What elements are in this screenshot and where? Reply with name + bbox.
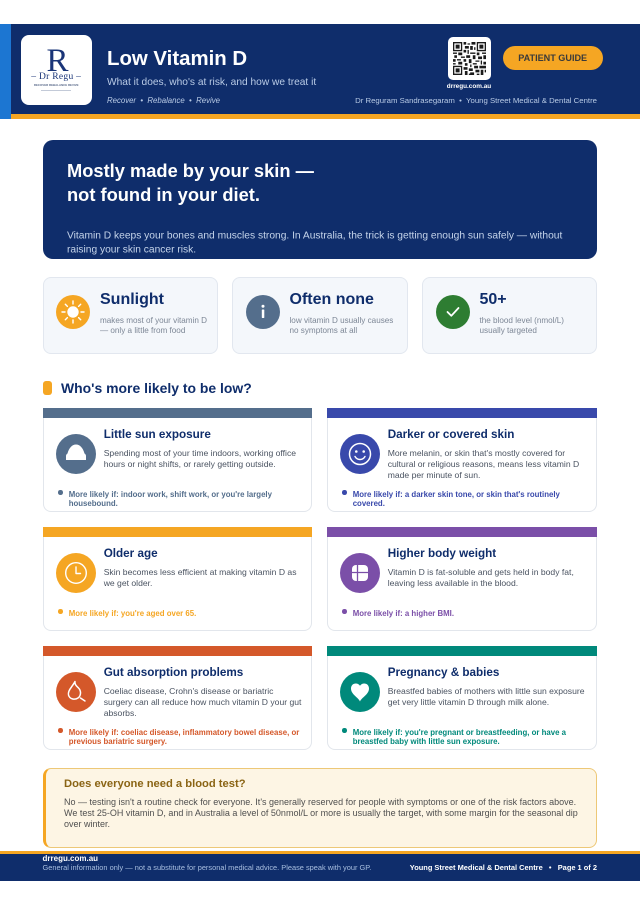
card body: Breastfed babies of mothers with little sun exposure	[388, 686, 584, 696]
bullet dot	[342, 609, 347, 614]
card body: cultural or religious reasons, means less vitamin D	[388, 459, 579, 469]
bullet dot	[58, 609, 63, 614]
hero body: raising your skin cancer risk.	[67, 244, 196, 256]
risk note: covered.	[353, 499, 385, 508]
footer disclaimer: General information only — not a substitute for personal medical advice. Please speak with your GP.	[42, 863, 371, 872]
callout body	[64, 797, 578, 829]
stat value: Sunlight	[100, 290, 164, 308]
icon: check	[436, 295, 470, 329]
risk note: More likely if: you're pregnant or breastfeeding, or have a	[353, 728, 566, 736]
icon: heart	[340, 672, 380, 712]
stat description	[290, 316, 393, 334]
card title: Little sun exposure	[104, 428, 211, 441]
risk note: More likely if: a higher BMI.	[353, 608, 454, 618]
card body: Coeliac disease, Crohn's disease or bariatric	[104, 686, 273, 696]
card body	[104, 448, 296, 469]
card body: hours or night shifts, or rarely getting outside.	[104, 459, 276, 469]
stat description	[480, 316, 564, 334]
colour bar	[327, 527, 597, 537]
footer website: drregu.com.au	[42, 854, 98, 863]
hero body: Vitamin D keeps your bones and muscles strong. In Australia, the trick is getting enough sun safely — without	[67, 230, 562, 242]
icon: sun	[56, 295, 90, 329]
card title: Gut absorption problems	[104, 666, 243, 679]
risk note: More likely if: indoor work, shift work, or you're largely	[69, 490, 272, 498]
risk note	[69, 728, 300, 746]
card body: More melanin, or skin that's mostly covered for	[388, 448, 565, 458]
card: gut absorption problems	[43, 646, 312, 750]
header banner	[0, 24, 640, 119]
tagline: Recover • Rebalance • Revive	[107, 96, 220, 105]
subtitle: What it does, who's at risk, and how we treat it	[107, 77, 316, 88]
stat description: no symptoms at all	[290, 326, 357, 334]
stat description	[100, 316, 207, 334]
risk note	[69, 490, 272, 508]
bullet dot	[58, 728, 63, 733]
patient guide button	[503, 46, 603, 70]
callout heading: Does everyone need a blood test?	[64, 778, 246, 790]
risk note: breastfed baby with little sun exposure.	[353, 737, 500, 746]
icon: body composition	[340, 553, 380, 593]
icon: smile	[340, 434, 380, 474]
card body: Skin becomes less efficient at making vitamin D as	[104, 567, 296, 577]
stat description: — only a little from food	[100, 326, 185, 334]
callout body: over winter.	[64, 819, 110, 829]
colour bar	[327, 408, 597, 418]
patient guide button: PATIENT GUIDE	[518, 53, 587, 63]
card body: surgery can all reduce how much vitamin D your gut	[104, 697, 301, 707]
stat description: low vitamin D usually causes	[290, 316, 393, 325]
QR code	[448, 37, 491, 80]
colour bar	[43, 527, 312, 537]
icon: info	[246, 295, 280, 329]
card body: leaving less available in the blood.	[388, 578, 518, 588]
bullet dot	[342, 490, 347, 495]
hero heading: Mostly made by your skin —	[67, 160, 314, 181]
hero heading	[67, 160, 314, 205]
callout body: We test 25-OH vitamin D, and in Australia a level of 50nmol/L or more is usually the target, with some margin for the seasonal dip	[64, 808, 578, 818]
footer	[0, 851, 640, 881]
card body: absorbs.	[104, 708, 137, 718]
logo strapline: RECOVER REBALANCE REVIVE	[34, 83, 79, 87]
heading marker	[42, 381, 52, 395]
card: higher body weight	[327, 527, 597, 631]
card body: get very little vitamin D through milk alone.	[388, 697, 549, 707]
icon: clock	[56, 553, 96, 593]
QR caption: drregu.com.au	[447, 83, 491, 90]
stat: sunlight	[42, 277, 218, 354]
icon: cloud	[56, 434, 96, 474]
logo monogram: R	[46, 42, 69, 78]
risk note	[353, 490, 560, 508]
card title: Darker or covered skin	[388, 428, 514, 441]
hero panel	[43, 140, 597, 259]
risk note: More likely if: you're aged over 65.	[69, 608, 196, 618]
card body	[104, 686, 302, 718]
colour bar	[43, 408, 312, 418]
left accent stripe	[0, 24, 11, 119]
card body	[388, 567, 574, 588]
stat description: makes most of your vitamin D	[100, 316, 207, 325]
callout: blood test	[43, 768, 597, 848]
logo card	[21, 34, 92, 105]
title: Low Vitamin D	[107, 48, 247, 70]
stat: 50+	[422, 277, 597, 354]
stat: often none	[232, 277, 408, 354]
callout body: No — testing isn't a routine check for everyone. It's generally reserved for people with symptoms or one of the risk factors above.	[64, 797, 576, 807]
heading text: Who's more likely to be low?	[61, 380, 252, 396]
stat description: the blood level (nmol/L)	[480, 316, 564, 325]
clinician and clinic: Dr Reguram Sandrasegaram • Young Street Medical & Dental Centre	[355, 96, 597, 105]
card title: Older age	[104, 547, 158, 560]
card body	[388, 686, 584, 707]
card: older age	[43, 527, 312, 631]
footer clinic and page: Young Street Medical & Dental Centre • Page 1 of 2	[410, 863, 597, 872]
stat value: Often none	[290, 290, 374, 308]
bullet dot	[342, 728, 347, 733]
logo ornament	[41, 90, 71, 91]
hero heading: not found in your diet.	[67, 184, 260, 205]
card title: Higher body weight	[388, 547, 496, 560]
card body: made per minute of sun.	[388, 470, 480, 480]
colour bar	[43, 646, 312, 656]
colour bar	[327, 646, 597, 656]
section heading	[43, 380, 252, 396]
logo name: – Dr Regu –	[31, 72, 81, 82]
card body: Spending most of your time indoors, working office	[104, 448, 296, 458]
stat value: 50+	[480, 290, 507, 308]
card: pregnancy and babies	[327, 646, 597, 750]
risk note	[353, 728, 566, 746]
header gold rule	[11, 114, 640, 119]
stat description: usually targeted	[480, 326, 537, 334]
card body	[388, 448, 579, 480]
risk note: More likely if: a darker skin tone, or skin that's routinely	[353, 490, 560, 498]
card body: Vitamin D is fat-soluble and gets held in body fat,	[388, 567, 574, 577]
card body	[104, 567, 296, 588]
card: little sun exposure	[43, 408, 312, 512]
card body: we get older.	[104, 578, 152, 588]
hero body	[67, 230, 562, 256]
card title: Pregnancy & babies	[388, 666, 499, 679]
bullet dot	[58, 490, 63, 495]
icon: stomach	[56, 672, 96, 712]
risk note: More likely if: coeliac disease, inflammatory bowel disease, or	[69, 728, 299, 736]
risk note: housebound.	[69, 499, 118, 508]
risk note: previous bariatric surgery.	[69, 737, 167, 746]
card: darker or covered skin	[327, 408, 597, 512]
